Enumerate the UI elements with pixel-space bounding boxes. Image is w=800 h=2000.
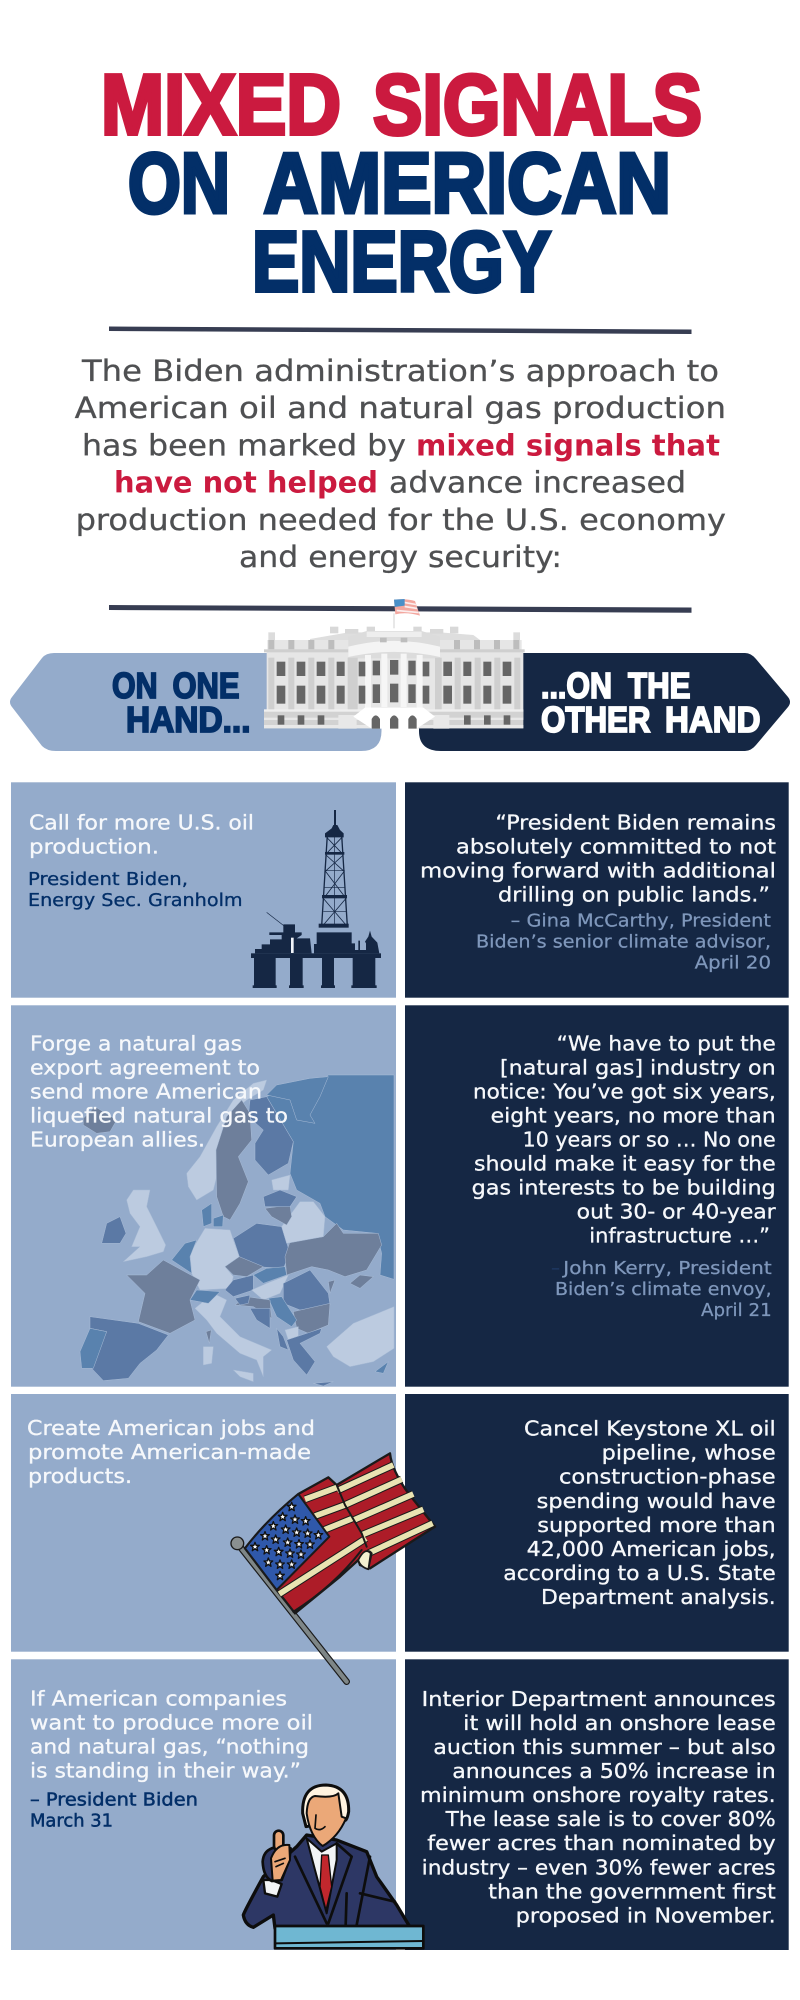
attribution: April 20 [695, 953, 771, 974]
attribution: – [551, 1258, 560, 1279]
text: Biden statement [30, 1687, 313, 1783]
text: cancel Keystone: construction-phase [559, 1465, 776, 1489]
text: call for more oil [29, 810, 254, 858]
intro paragraph: advance increased [389, 466, 686, 500]
attribution [476, 911, 771, 974]
title: ON [128, 136, 230, 232]
text: Biden statement: want to produce more oil [30, 1711, 313, 1735]
attribution: Biden’s senior climate advisor, [476, 932, 771, 953]
text: attribution [28, 869, 243, 911]
quote text: out 30- or 40-year [577, 1200, 777, 1224]
banner: on one hand [10, 653, 382, 751]
text: export agreement: European allies. [30, 1128, 205, 1152]
quote text: drilling on public lands.” [498, 882, 770, 906]
text: lease auction: industry – even 30% fewer acres [422, 1855, 776, 1879]
banner: on the other hand: ...ON [541, 665, 612, 706]
attribution: Biden’s climate envoy, [555, 1279, 772, 1300]
text: create jobs [27, 1416, 315, 1488]
panel: American jobs [11, 1394, 396, 1652]
banner: on one hand: HAND... [126, 699, 250, 740]
quote text: absolutely committed to not [456, 834, 776, 858]
quote text: eight years, no more than [491, 1104, 776, 1128]
quote text: should make it easy for the [474, 1152, 776, 1176]
text: create jobs: Create American jobs and [27, 1416, 315, 1440]
attribution: John Kerry, President [562, 1258, 772, 1279]
text: Biden statement: is standing in their way.” [30, 1759, 301, 1783]
attribution: – Gina McCarthy, President [511, 911, 771, 932]
text: lease auction: it will hold an onshore lease [463, 1711, 776, 1735]
banner: on one hand: ONE [172, 665, 240, 706]
text: export agreement: export agreement to [30, 1056, 260, 1080]
quote text [420, 810, 776, 906]
intro paragraph: have not helped [114, 466, 378, 500]
text: cancel Keystone: 42,000 American jobs, [527, 1537, 776, 1561]
panel: nothing standing in their way [11, 1659, 396, 1950]
quote text: “We have to put the [557, 1032, 776, 1056]
text: attribution: President Biden, [28, 869, 188, 890]
quote text: “President Biden remains [495, 810, 776, 834]
text: cancel Keystone [503, 1417, 776, 1609]
text: export agreement: send more American [30, 1080, 262, 1104]
intro paragraph: mixed signals that [416, 428, 720, 462]
text: lease auction: minimum onshore royalty rates. [420, 1783, 776, 1807]
text: lease auction: auction this summer – but also [433, 1735, 776, 1759]
text: export agreement: liquefied natural gas to [30, 1104, 288, 1128]
icon: oil rig [251, 810, 381, 988]
text: lease auction: The lease sale is to cover 80% [445, 1807, 776, 1831]
intro paragraph: The Biden administration’s approach to [81, 354, 719, 388]
banner: on the other hand [419, 653, 790, 751]
text: attribution: Energy Sec. Granholm [28, 890, 243, 911]
panel: call for more oil production [11, 782, 396, 998]
quote text: moving forward with additional [420, 858, 776, 882]
text: export agreement [30, 1032, 288, 1152]
text: Biden statement: If American companies [30, 1687, 287, 1711]
title: SIGNALS [373, 58, 702, 153]
attribution [30, 1790, 198, 1832]
panel: natural gas export agreement [11, 1005, 396, 1387]
panel: Keystone XL [405, 1394, 789, 1652]
title: ENERGY [252, 215, 551, 310]
intro paragraph: has been marked by [82, 428, 406, 462]
text: cancel Keystone: supported more than [537, 1513, 776, 1537]
attribution: March 31 [30, 1811, 113, 1832]
title [101, 58, 702, 310]
text: cancel Keystone: spending would have [537, 1489, 776, 1513]
icon: White House [264, 599, 525, 729]
icon: waving American flag [231, 1453, 435, 1682]
text: lease auction [420, 1687, 776, 1928]
text: create jobs: products. [28, 1464, 132, 1488]
attribution: – President Biden [30, 1790, 198, 1811]
text: call for more oil: Call for more U.S. oil [29, 810, 254, 834]
text: lease auction: Interior Department announces [422, 1687, 776, 1711]
text: cancel Keystone: according to a U.S. State [503, 1561, 776, 1585]
quote text: 10 years or so … No one [523, 1128, 776, 1152]
attribution [551, 1258, 772, 1321]
banner: on the other hand: HAND [665, 699, 760, 740]
panel: Interior Department lease [405, 1659, 789, 1950]
quote text [472, 1032, 777, 1248]
text: cancel Keystone: Cancel Keystone XL oil [524, 1417, 776, 1441]
text: lease auction: announces a 50% increase in [452, 1759, 776, 1783]
text: lease auction: fewer acres than nominated by [427, 1831, 776, 1855]
quote text: gas interests to be building [472, 1176, 776, 1200]
quote text: notice: You’ve got six years, [473, 1080, 776, 1104]
icon: President Biden at podium [243, 1785, 423, 1948]
intro paragraph: production needed for the U.S. economy [76, 503, 726, 537]
text: export agreement: Forge a natural gas [30, 1032, 242, 1056]
panel: Kerry quote [405, 1005, 789, 1387]
text: Biden statement: and natural gas, “nothing [30, 1735, 309, 1759]
banner: on the other hand: OTHER [541, 699, 651, 740]
banner: on the other hand: THE [628, 665, 690, 706]
map: Europe [80, 1075, 394, 1386]
text: call for more oil: production. [29, 834, 159, 858]
panel: McCarthy quote [405, 782, 789, 998]
icon: small American flag [393, 599, 420, 628]
attribution: April 21 [701, 1300, 772, 1321]
title: AMERICAN [264, 136, 671, 232]
banner: on one hand: ON [112, 665, 158, 706]
text: lease auction: proposed in November. [516, 1904, 776, 1928]
intro paragraph: American oil and natural gas production [75, 391, 726, 425]
intro paragraph: and energy security: [239, 540, 562, 574]
quote text: [natural gas] industry on [500, 1056, 776, 1080]
title: MIXED [101, 58, 341, 153]
text: lease auction: than the government first [488, 1880, 776, 1904]
text: cancel Keystone: Department analysis. [541, 1585, 776, 1609]
text: cancel Keystone: pipeline, whose [602, 1441, 776, 1465]
quote text: infrastructure …” [589, 1224, 770, 1248]
intro paragraph [75, 354, 726, 574]
text: create jobs: promote American-made [28, 1440, 311, 1464]
